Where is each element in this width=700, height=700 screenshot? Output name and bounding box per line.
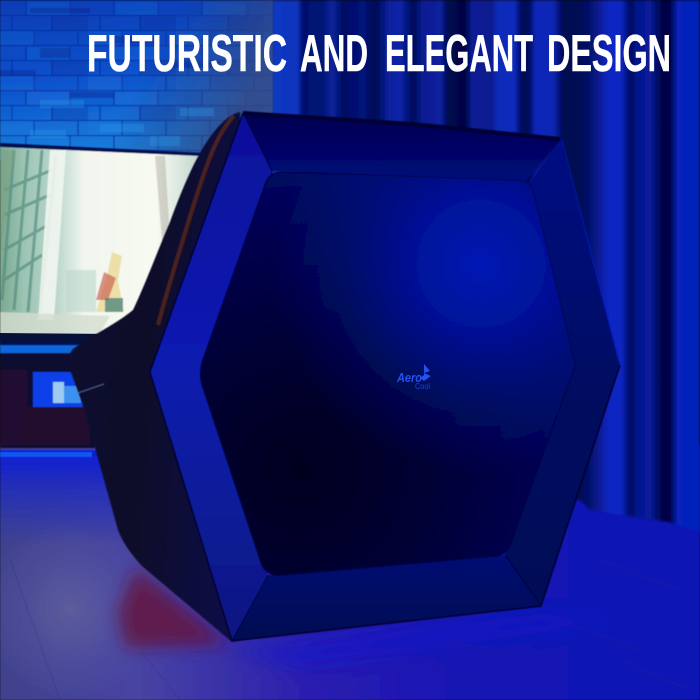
console device	[53, 382, 81, 403]
curtain backdrop	[272, 0, 700, 532]
title	[87, 25, 671, 83]
Aerocool logo: Aero	[396, 370, 422, 385]
TV bottom bezel	[0, 333, 110, 342]
frame: top band	[243, 113, 560, 182]
frame: bottom band	[232, 555, 541, 641]
Aerocool logo	[396, 364, 431, 391]
media cabinet	[0, 340, 95, 457]
red reflected glow	[118, 568, 228, 648]
frame: left band	[150, 113, 272, 641]
stone brick wall	[0, 0, 273, 160]
title: ELEGANT	[385, 25, 533, 83]
chair inner hexagon panel	[201, 172, 575, 575]
TV screen with game scene	[0, 143, 205, 345]
title: FUTURISTIC	[87, 25, 287, 83]
game character	[96, 252, 124, 312]
floor	[0, 445, 700, 700]
frame: right band	[505, 139, 620, 606]
title: AND	[300, 25, 368, 83]
chair side shell	[69, 112, 250, 642]
Aerocool logo: Cool	[415, 382, 430, 391]
chair hexagonal front frame	[150, 113, 620, 641]
